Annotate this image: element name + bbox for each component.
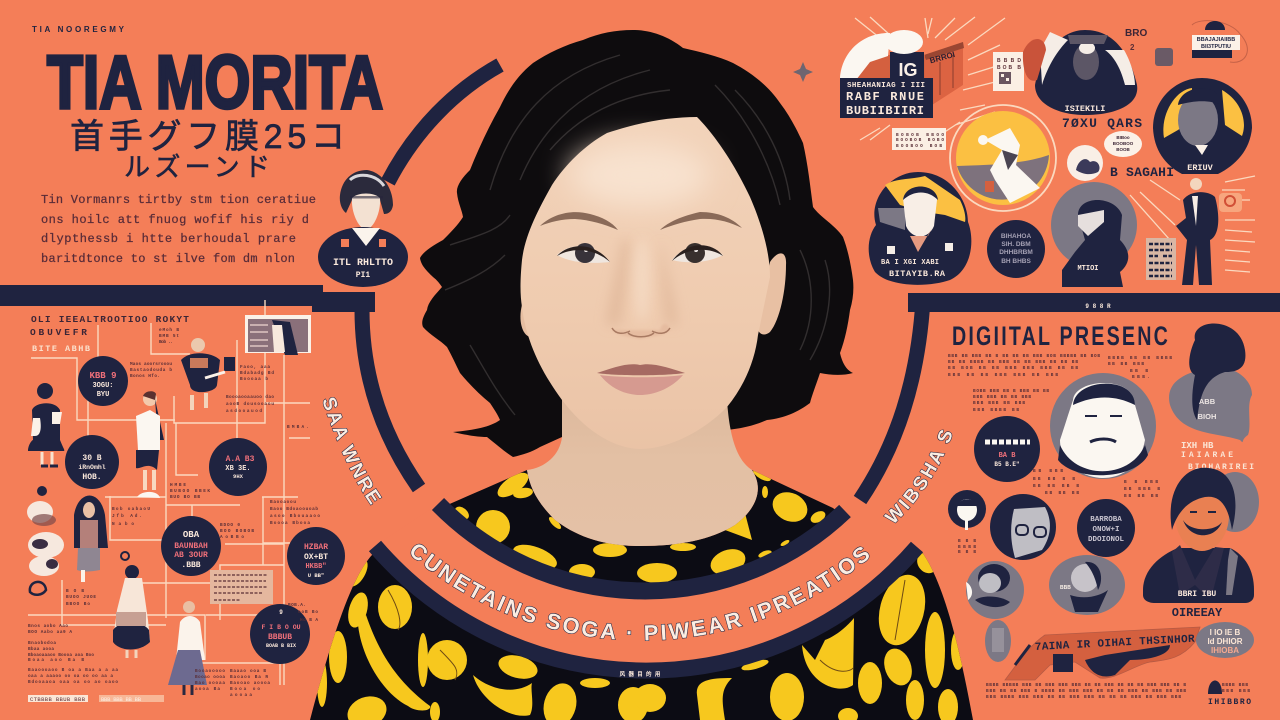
intro paragraph: Tin Vormanrs tirtby stm tion ceratiue xyxy=(41,193,316,207)
dark circle note xyxy=(974,416,1040,482)
small text blocks: BB BB BBB xyxy=(1108,362,1144,367)
curved label left: SAA WNRE xyxy=(322,397,382,506)
footer paragraph xyxy=(986,683,1186,700)
small text blocks: Bob .. xyxy=(159,340,173,345)
small text blocks: eMoh B xyxy=(159,328,179,333)
small logo: BBBB BBB xyxy=(1222,683,1248,688)
small text blocks: Bboaoaaaoo Boooa aoa Boo xyxy=(28,653,94,658)
text circle: DDOIONOL xyxy=(1088,536,1124,544)
circle note 3: A.A B3 xyxy=(226,455,255,464)
small text blocks: BBBB xyxy=(958,545,976,550)
small text blocks: BOO BOBOB xyxy=(220,529,254,534)
small portrait card xyxy=(318,170,408,287)
small text blocks: Ho B A xyxy=(300,618,318,623)
small text blocks: BB BBB xyxy=(1033,469,1063,474)
arc: lower left ring segment xyxy=(362,310,419,488)
small text blocks: Booaooooo xyxy=(195,669,225,674)
dark text circle xyxy=(987,220,1045,278)
portrait: nose highlight xyxy=(635,238,649,322)
grey right oval: Id DHIOR xyxy=(1207,637,1243,646)
tag strip: BBB BBB BB BB xyxy=(101,696,142,703)
small text blocks: BB BB B B xyxy=(1033,477,1075,482)
small text blocks: Bastaodouda b xyxy=(130,368,172,373)
circle note 6: BBBUB xyxy=(268,633,292,642)
small text blocks: Baoo Bdoaoouoab xyxy=(270,507,318,512)
text circle xyxy=(1077,499,1135,557)
circle note 5: OX+BT xyxy=(304,553,328,562)
small text blocks: BBOO Bo xyxy=(66,602,90,607)
small text blocks: aooB dousooaou xyxy=(226,402,274,407)
panel heading: BITE ABHB xyxy=(32,344,90,354)
small text blocks: BB BB BB xyxy=(1045,491,1079,496)
portrait: forehead highlight xyxy=(570,143,710,207)
small text blocks: Baooaoou xyxy=(270,500,296,505)
feather and trunk: IG xyxy=(898,60,918,80)
circle note 4: AB 3OUR xyxy=(174,551,208,560)
portrait: left eyebrow xyxy=(540,212,618,230)
portrait: shirt xyxy=(300,460,980,720)
badge: man portrait lower left xyxy=(869,172,971,285)
standing suit figure xyxy=(1176,178,1218,285)
small text blocks: BBB BBB BB BBB xyxy=(973,401,1025,406)
small text blocks: Boooa Bbooa xyxy=(270,521,310,526)
small text blocks: BB B xyxy=(1130,369,1148,374)
grey portrait oval xyxy=(1049,555,1125,615)
portrait xyxy=(300,30,980,720)
small text blocks: BOB xyxy=(66,589,84,594)
figure badge top xyxy=(1035,30,1137,115)
small text blocks: BBB xyxy=(958,539,976,544)
circle note 3: 9HX xyxy=(233,473,244,480)
small text blocks: BB BB BB B xyxy=(1033,484,1079,489)
cream label: BIOHARIREI xyxy=(1188,463,1254,472)
circle note 2: 30 B xyxy=(82,454,102,463)
dark text circle: BH BHBS xyxy=(1001,258,1031,265)
text: OIREEAY: OIREEAY xyxy=(1172,606,1223,620)
small text blocks: BBB. xyxy=(1132,375,1150,380)
small logo: IHIBBRO xyxy=(1208,698,1251,707)
arc: upper left ring segment xyxy=(388,65,500,182)
circle note 3: XB 3E. xyxy=(225,465,251,473)
note card: BOBOB BBOO xyxy=(896,133,944,138)
small text blocks xyxy=(948,354,1172,555)
QR note: BOB B xyxy=(997,65,1021,71)
subtitle: Japanese line two: ルズーンド xyxy=(124,152,270,182)
small text blocks: BBB xyxy=(958,550,976,555)
dark text circle: SIH. DBM xyxy=(1001,241,1031,248)
circle note 2: iRnOmhl xyxy=(78,464,106,471)
tag strip: CTBBBB BBUB BBB xyxy=(30,696,86,703)
grey side oval xyxy=(985,620,1011,662)
small text blocks: Baaao ooa B xyxy=(230,669,266,674)
portrait circle right xyxy=(1153,78,1252,174)
portrait: face xyxy=(520,117,770,449)
small text blocks: Faoo, aaa xyxy=(240,365,270,370)
header: small kicker: TIA NOOREGMY xyxy=(32,25,125,34)
small text blocks: BBB BB BB BBB BBB BB BBB xyxy=(948,373,1058,378)
small text blocks: asdooauod xyxy=(226,409,262,414)
sketch cluster top: BII3TPUTIU xyxy=(1201,44,1231,50)
panel: left timeline xyxy=(27,300,345,703)
heading: DIGIITAL PRESENC xyxy=(952,321,1170,351)
cream label: IAIARAE xyxy=(1181,451,1233,460)
portrait: collar band: 风 器 目 的 用 xyxy=(620,670,660,678)
small text blocks: Bnos aobo Aao xyxy=(28,624,68,629)
small text blocks: AoBBo xyxy=(220,535,244,540)
dark text circle: DHHBRBM xyxy=(999,249,1033,256)
small oval note: BIBoo xyxy=(1116,135,1130,140)
figure: patterned figure xyxy=(27,486,64,595)
title: TIA MORITA xyxy=(47,40,383,124)
circle note 6 xyxy=(250,604,310,664)
small text blocks: aooa Ba xyxy=(195,687,220,692)
grey portrait circle lower xyxy=(966,561,1024,619)
grey right oval: IHIOBA xyxy=(1211,646,1239,655)
small oval note: BOOB xyxy=(1116,147,1131,152)
feather and trunk: BRROI xyxy=(929,50,956,65)
circle note 1: BYU xyxy=(97,391,109,399)
circle note 4: BAUNBAH xyxy=(174,542,208,551)
circle note 6: 9 xyxy=(279,609,283,616)
portrait: right eyebrow xyxy=(660,212,742,230)
small text blocks: Bonos Hfo. xyxy=(130,374,160,379)
portrait: hair highlights xyxy=(445,55,830,415)
cream label xyxy=(1181,441,1254,472)
small logo xyxy=(1208,680,1251,707)
small oval note xyxy=(1104,131,1142,157)
text: heading 7OXU GARS: 7ØXU QARS xyxy=(1062,116,1142,131)
small text blocks: Nabo xyxy=(112,522,134,527)
note card: BOOBOB BOBO xyxy=(896,138,944,143)
small text blocks: ooB Bo xyxy=(298,610,318,615)
circle note 5: U BB" xyxy=(308,572,324,579)
small text blocks: BOBB BBB BB B BBB BB BB xyxy=(973,389,1049,394)
bus graphic: 7AINA IR OIHAI THSINHOR xyxy=(1035,634,1195,654)
small text blocks: Bdooaaoa oaa oa oo ao oaoo xyxy=(28,680,118,685)
portrait: collar band xyxy=(375,504,917,678)
panel heading: OBUVEFR xyxy=(30,327,87,338)
cream label: IXH HB xyxy=(1181,441,1214,451)
QR note xyxy=(993,52,1024,91)
text: B SAGAHI: B SAGAHI xyxy=(1110,165,1174,180)
face circle xyxy=(1050,373,1156,479)
small text blocks: BB BB BBBB BB BBB BB BB BBB BB BB BB xyxy=(948,360,1078,365)
footer paragraph: BBB BBBB BBB BBB BB BB BBB BBB BB BB BB BBB BB BBB BBB xyxy=(986,695,1181,700)
small text blocks: BUOO JUOE xyxy=(66,595,96,600)
star icon xyxy=(793,62,813,82)
small text blocks: Maos aoorsrooou xyxy=(130,362,172,367)
dark circle note: BA B xyxy=(999,452,1016,460)
sketch cluster top xyxy=(1023,21,1247,81)
small text blocks: BB BBB B xyxy=(1124,487,1160,492)
small text blocks: BB BOB BB BB BBB BBB BBB BB BB xyxy=(948,366,1078,371)
arc: lower right ring segment xyxy=(860,300,923,500)
small text blocks: asoo Bbouaaoo xyxy=(270,514,320,519)
note card: BOOBOO BOB xyxy=(896,144,942,149)
bar: left divider xyxy=(0,285,375,312)
panel: digital presence xyxy=(948,321,1259,707)
small text blocks: BBB BBBB BB xyxy=(973,408,1019,413)
note card xyxy=(892,128,946,150)
small text blocks: BOO Aabo aa9 A xyxy=(28,630,72,635)
figure badge top: ISIEKILI xyxy=(1065,104,1105,114)
portrait: lips xyxy=(597,364,685,395)
portrait circle right: ERIUV xyxy=(1187,163,1214,173)
banner card xyxy=(840,78,933,118)
man portrait xyxy=(1143,468,1259,603)
figure: woman with books xyxy=(181,338,235,410)
figure: woman in white shirt xyxy=(136,391,164,498)
circle note 3 xyxy=(209,438,267,496)
QR note: BBBD xyxy=(997,58,1021,64)
banner card: RABF RNUE xyxy=(846,90,924,104)
circle note 6: F I B O OU xyxy=(261,624,301,631)
grey right oval: I IO IE B xyxy=(1210,628,1241,637)
small text blocks: BMB 5t xyxy=(159,334,179,339)
small text blocks: BDOO 0 xyxy=(220,523,240,528)
banner card: BUBIIBIIRI xyxy=(846,104,924,118)
small text blocks: Bbaa aooa xyxy=(28,647,54,652)
small text blocks: B B BBB xyxy=(1124,480,1158,485)
intro paragraph: ons hoilc att fnuog wofif his riy d xyxy=(41,213,309,227)
small text blocks: Bao oooaa xyxy=(195,681,225,686)
tag strip xyxy=(28,695,164,703)
rays xyxy=(855,17,1255,272)
dark circle note: B5 B.E" xyxy=(994,461,1020,468)
man portrait: BBRI IBU xyxy=(1178,590,1216,599)
small text blocks: BBB BBB BB BB BBB xyxy=(973,395,1031,400)
circle note 4: OBA xyxy=(183,530,200,540)
small text blocks: Boooaooaauoo dao xyxy=(226,395,274,400)
circle note 2: HOB. xyxy=(82,473,102,482)
circle note 1 xyxy=(78,356,128,406)
lined note xyxy=(1146,238,1176,280)
circle note 4: .BBB xyxy=(181,561,201,570)
small oval note: BOOBOO xyxy=(1113,141,1134,146)
small text blocks: Baoaoo Ba R xyxy=(230,675,268,680)
bar: right divider xyxy=(908,293,1280,312)
circle note 1: KBB 9 xyxy=(89,371,117,381)
portrait: left ear xyxy=(520,305,532,337)
circle note 6: BOAB B BIX xyxy=(266,643,296,649)
portrait: neck xyxy=(527,400,758,546)
curved label right: WIBSHA S xyxy=(883,430,952,524)
text circle: BARROBA xyxy=(1090,516,1122,524)
text circle: ONOW+I xyxy=(1092,526,1120,534)
small text blocks: Baaoooaoo B oa a Baa a a aa xyxy=(28,668,118,673)
footer paragraph: BBB BB BB BBB B BBBB BB BBB BBB BB BB BB BBB BB BBB BB BBB xyxy=(986,689,1186,694)
badge: man portrait lower left: BA I XGI XABI xyxy=(881,259,939,267)
feather and trunk xyxy=(840,30,964,105)
badge: man portrait lower left: BITAYIB.RA xyxy=(889,269,946,279)
small text blocks: Boaa aoo Ba B xyxy=(28,658,84,663)
circle note 5: HKBB" xyxy=(305,563,327,571)
portrait: nose xyxy=(612,324,670,339)
small text blocks: BMBA. xyxy=(287,425,309,430)
grey portrait oval: BBB xyxy=(1060,585,1071,591)
bus graphic xyxy=(1005,627,1200,680)
subtitle: Japanese line one: 首手グフ膜25コ xyxy=(70,118,345,156)
panel: upper right collage xyxy=(840,17,1255,287)
intro paragraph: dlypthessb i htte berhoudal prare xyxy=(41,232,296,246)
small text blocks: BUBOO BBEK xyxy=(170,489,210,494)
small text blocks: Boooaa b xyxy=(240,377,268,382)
collar text: CUNETAINS SOGA · PIWEAR IPREATIOS xyxy=(410,544,870,641)
small text blocks: BBBB BB BB BBBB xyxy=(1108,356,1172,361)
small text blocks: BUO BO BB xyxy=(170,495,200,500)
circle note 5 xyxy=(287,527,345,585)
small text blocks: Jfb Ad. xyxy=(112,514,142,519)
yellow circle illustration xyxy=(950,105,1056,211)
connector lines xyxy=(28,300,310,685)
small text blocks: HMBE xyxy=(170,483,186,488)
sketch cluster top: 2 xyxy=(1130,43,1135,52)
small text blocks: Bdabadg Bd xyxy=(240,371,274,376)
small face circle xyxy=(948,490,986,530)
sketch cluster top: BBAJAJIAIIBB xyxy=(1197,37,1235,43)
small logo: BBB BBB xyxy=(1222,689,1250,694)
orange icon tag xyxy=(1219,193,1242,212)
small text blocks: Bnaobodoa xyxy=(28,641,56,646)
small text blocks xyxy=(28,328,320,698)
small text blocks: aooaa xyxy=(230,693,252,698)
grey right oval xyxy=(1196,622,1254,658)
small text blocks: Booao oooa xyxy=(195,675,225,680)
dark text circle: BIHAHOA xyxy=(1001,233,1031,240)
circle note 4 xyxy=(161,516,221,576)
small text blocks: BBB BB BBB BB B BB BB BB BBB BOB BBBBB BB BOB xyxy=(948,354,1100,359)
grey circle figure: MTIOI xyxy=(1077,265,1099,273)
portrait: nose shading xyxy=(606,240,678,325)
panel heading: OLI IEEALTROOTIOO ROKYT xyxy=(31,314,189,325)
beige note xyxy=(210,570,273,604)
small text blocks: oaa a aaaoo oo oa oo oo aa a xyxy=(28,674,113,679)
small portrait card: ITL RHLTTO xyxy=(333,258,393,269)
circle note 5: HZBAR xyxy=(304,543,328,552)
portrait: right eye xyxy=(672,243,723,263)
photo box xyxy=(245,315,311,355)
silhouette speech blob: BIOH xyxy=(1198,412,1216,421)
glasses circle xyxy=(990,494,1056,560)
silhouette speech blob: ABB xyxy=(1199,397,1216,406)
figure: woman in tan coat xyxy=(113,552,150,658)
footer paragraph: BBBB BBBBB BBB BB BBB BBB BBB BB BB BBB BB BB BB BBB BBB BB B xyxy=(986,683,1186,688)
banner card: SHEAHANIAG I III xyxy=(847,82,925,90)
bar: right divider: 9 8 8 R xyxy=(1085,303,1111,310)
small text blocks: BB BB BB xyxy=(1124,494,1158,499)
small text blocks: Booa oo xyxy=(230,687,260,692)
grey circle figure xyxy=(1051,182,1137,287)
small portrait card: PI1 xyxy=(356,271,370,280)
figure: woman in grey skirt xyxy=(168,601,207,695)
circle note 1: 3OGU: xyxy=(92,382,114,390)
small text blocks: BOB.A. xyxy=(288,603,306,608)
silhouette speech blob xyxy=(1169,324,1252,442)
panel heading xyxy=(30,314,189,354)
portrait: left eye xyxy=(557,243,610,263)
figure: long-haired woman xyxy=(74,495,108,582)
small white circle icon xyxy=(1067,145,1103,181)
small text blocks: Baooao aoooa xyxy=(230,681,270,686)
intro paragraph xyxy=(41,193,316,266)
portrait: hair back xyxy=(420,30,853,457)
circle note 2 xyxy=(65,435,119,489)
sketch cluster top: BRO xyxy=(1125,28,1147,39)
intro paragraph: baritdtonce to st ilve fom dm nlon xyxy=(41,252,295,266)
figure: woman in dark dress xyxy=(28,383,64,466)
small text blocks: Bob oabaoU xyxy=(112,507,150,512)
portrait: right ear xyxy=(758,253,786,334)
